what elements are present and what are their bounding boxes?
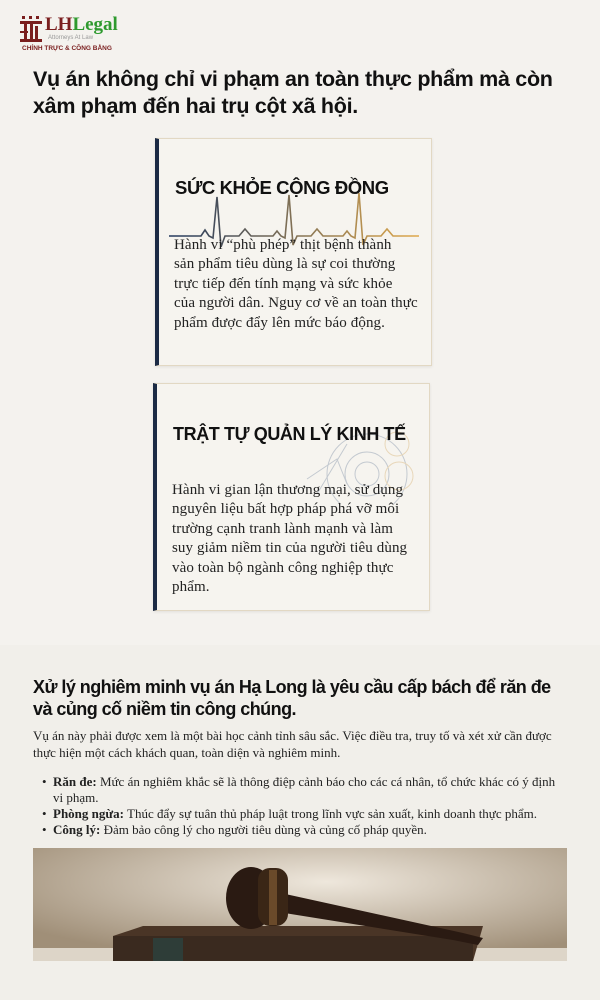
icon: logo mark [20,16,42,42]
text block: nguyên liệu bất hợp pháp phá vỡ môi [172,501,399,517]
text block: Hành vi “phù phép” thịt bệnh thành [174,237,392,253]
logo text: LHLegal [45,14,118,35]
logo: Attorneys At Law [48,35,93,41]
heading: TRẬT TỰ QUẢN LÝ KINH TẾ [173,424,406,444]
text block [174,237,418,331]
text block: phẩm. [172,579,210,595]
bullet list: Phòng ngừa: Thúc đẩy sự tuân thủ pháp luật trong lĩnh vực sản xuất, kinh doanh thực phẩm. [53,806,537,821]
title: Vụ án không chỉ vi phạm an toàn thực phẩm mà còn xâm phạm đến hai trụ cột xã hội. [33,67,553,118]
heading: SỨC KHỎE CỘNG ĐỒNG [175,177,389,198]
text block: trực tiếp đến tính mạng và sức khỏe [174,276,392,292]
heading: và củng cố niềm tin công chúng. [33,699,296,719]
bullet list: Công lý: Đảm bảo công lý cho người tiêu dùng và củng cố pháp quyền. [53,822,427,837]
text block: vào toàn bộ ngành công nghiệp thực [172,560,393,576]
bullet list: Răn đe: Mức án nghiêm khắc sẽ là thông điệp cảnh báo cho các cá nhân, tổ chức khác có ý định vi phạm. [53,774,555,805]
bullet list [42,774,555,837]
text block: Vụ án này phải được xem là một bài học cảnh tỉnh sâu sắc. Việc điều tra, truy tố và xét xử cần được thực hiện một cách khách quan, toàn diện và nghiêm minh. [33,728,552,760]
panel: public health [155,138,432,366]
text block: Hành vi gian lận thương mại, sử dụng [172,482,403,498]
text block: sản phẩm tiêu dùng là sự coi thường [174,256,395,272]
logo [20,14,118,52]
panel: conclusion section [0,645,600,1000]
text block [172,482,407,595]
text block: của người dân. Nguy cơ về an toàn thực [174,295,418,311]
icon: gears [306,432,414,504]
image: gavel on book [33,848,567,961]
text block: trường cạnh tranh lành mạnh và làm [172,521,393,537]
panel: economic order [153,383,430,611]
text block: suy giảm niềm tin của người tiêu dùng [172,540,407,556]
heading: Xử lý nghiêm minh vụ án Hạ Long là yêu cầu cấp bách để răn đe [33,677,551,697]
logo slogan: CHÍNH TRỰC & CÔNG BẰNG [22,45,112,52]
text block: phẩm được đẩy lên mức báo động. [174,315,385,331]
heading [33,677,551,719]
icon: heartbeat line [169,192,419,247]
